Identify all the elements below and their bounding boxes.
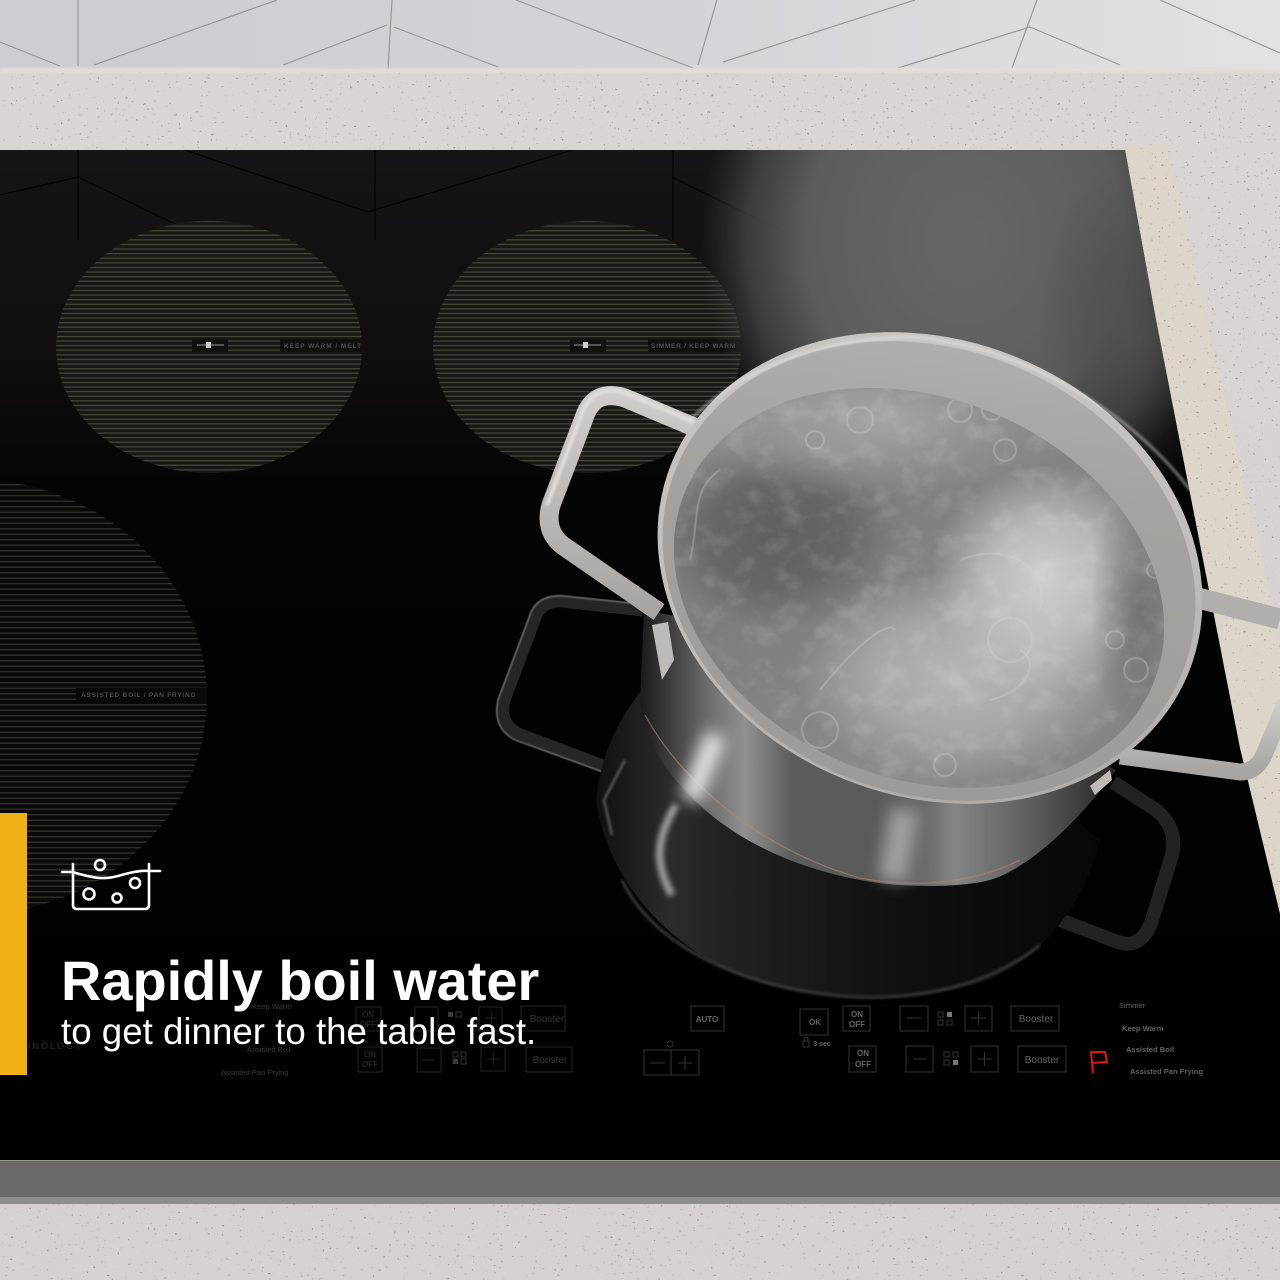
right zone labels: Assisted Boil [1126, 1045, 1174, 1054]
subheadline: to get dinner to the table fast. [61, 1011, 536, 1052]
reflected left handle [503, 601, 643, 768]
control panel: Booster [1025, 1055, 1060, 1066]
burner: keep warm / melt: KEEP WARM / MELT [284, 343, 362, 350]
right zone labels: Assisted Pan Frying [1130, 1067, 1203, 1076]
burner: assisted boil / pan frying: ASSISTED BOIL / PAN FRYING [81, 692, 196, 699]
control panel: AUTO [696, 1015, 718, 1024]
headline: Rapidly boil water [61, 949, 539, 1012]
left zone labels: Assisted Pan Frying [221, 1068, 289, 1077]
reflection of pot in glass [497, 596, 1173, 997]
cooktop glass [0, 150, 1280, 1160]
reflected right handle [1031, 782, 1173, 944]
control panel: Booster [530, 1014, 565, 1025]
burner: simmer / keep warm: SIMMER / KEEP WARM [651, 343, 736, 350]
right zone labels [1119, 1001, 1203, 1076]
pot [540, 332, 1280, 892]
control panel: ON [364, 1050, 376, 1059]
left zone buttons [356, 1006, 572, 1072]
control panel: ON [857, 1049, 869, 1058]
burner: simmer / keep warm [433, 221, 741, 473]
left zone labels [221, 1002, 292, 1077]
control panel [24, 1001, 1203, 1077]
rim highlight [690, 337, 1190, 490]
right handle upper [1198, 598, 1280, 619]
rim [586, 252, 1274, 884]
left handle [549, 396, 694, 612]
boiling water [674, 388, 1164, 788]
inner wall [593, 263, 1265, 879]
control panel: Booster [1019, 1014, 1054, 1025]
icon: boiling pot [62, 860, 160, 909]
tile wall [0, 0, 1280, 73]
control panel: ON [362, 1010, 374, 1019]
control panel: ON [851, 1010, 863, 1019]
hidden word: technology: HNOLOGY [24, 1041, 83, 1051]
control panel: OFF [362, 1060, 378, 1069]
burner: keep warm / melt [56, 221, 362, 473]
control panel: OFF [855, 1060, 871, 1069]
control panel: OFF [360, 1020, 376, 1029]
burner: assisted boil / pan frying [0, 479, 207, 915]
steam [712, 150, 1178, 462]
rivet [652, 622, 674, 680]
left zone labels: Keep Warm [252, 1002, 292, 1011]
control panel: OK [809, 1018, 821, 1027]
red P display [1091, 1052, 1107, 1073]
stainless trim around cooktop [0, 1159, 1280, 1204]
control panel: OFF [849, 1020, 865, 1029]
right zone labels: Simmer [1119, 1001, 1146, 1010]
pot body [640, 610, 1116, 886]
right handle lower [1120, 702, 1280, 772]
control panel: 3 sec [813, 1041, 831, 1048]
right zone buttons [843, 1006, 1066, 1072]
reflected pot body [596, 680, 1100, 996]
right zone labels: Keep Warm [1122, 1024, 1164, 1033]
left zone power dots [448, 1012, 466, 1064]
centre controls [644, 1006, 828, 1075]
yellow accent bar [0, 813, 27, 1075]
control panel: Booster [533, 1055, 568, 1066]
left zone labels: Assisted Boil [247, 1045, 291, 1054]
